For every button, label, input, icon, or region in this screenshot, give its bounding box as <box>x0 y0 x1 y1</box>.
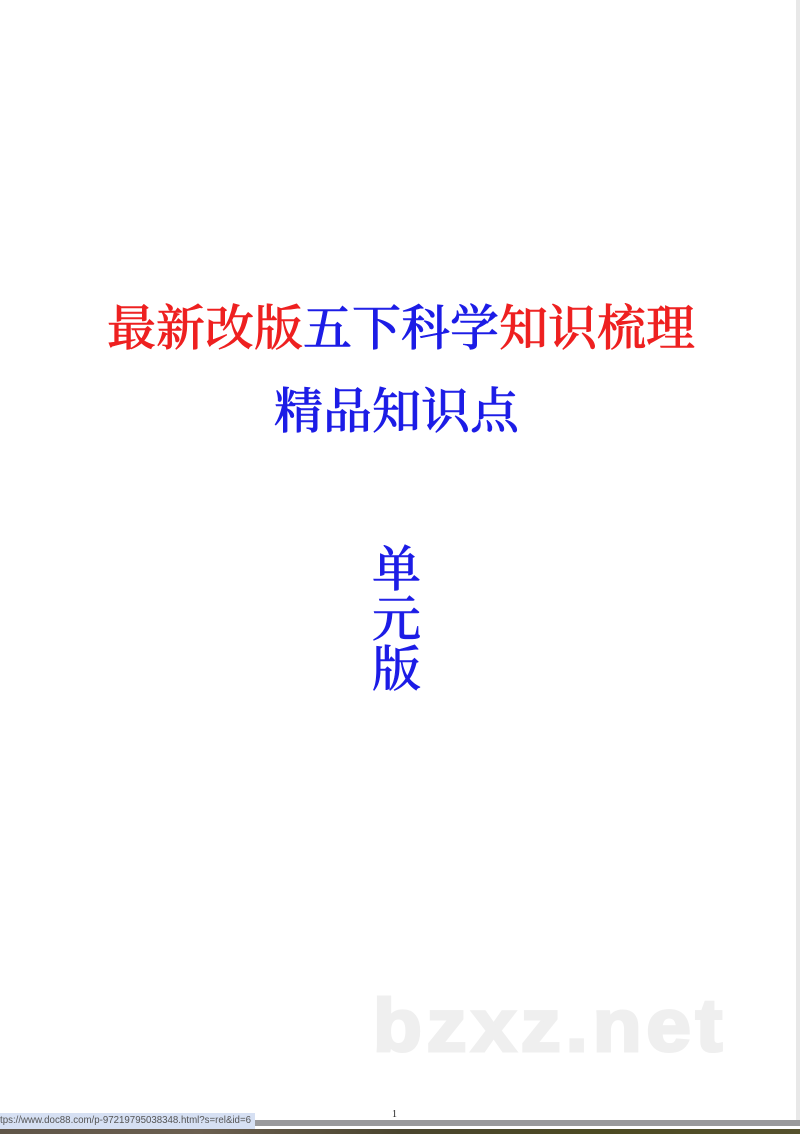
right page edge <box>796 0 800 1120</box>
vertical label: unit edition: 单 <box>372 542 421 597</box>
vertical label: unit edition <box>372 542 421 697</box>
vertical label: unit edition: 元 <box>372 592 421 647</box>
vertical label: unit edition: 版 <box>372 642 421 697</box>
bottom photo strip <box>0 1129 800 1134</box>
bottom grey bar <box>0 1120 800 1126</box>
url tooltip <box>0 1113 255 1129</box>
title: 最新改版五下科学知识梳理 <box>107 301 695 356</box>
subtitle: 精品知识点 <box>274 384 519 439</box>
page number: 1 <box>392 1109 397 1120</box>
watermark: bzxz.net <box>373 984 727 1067</box>
